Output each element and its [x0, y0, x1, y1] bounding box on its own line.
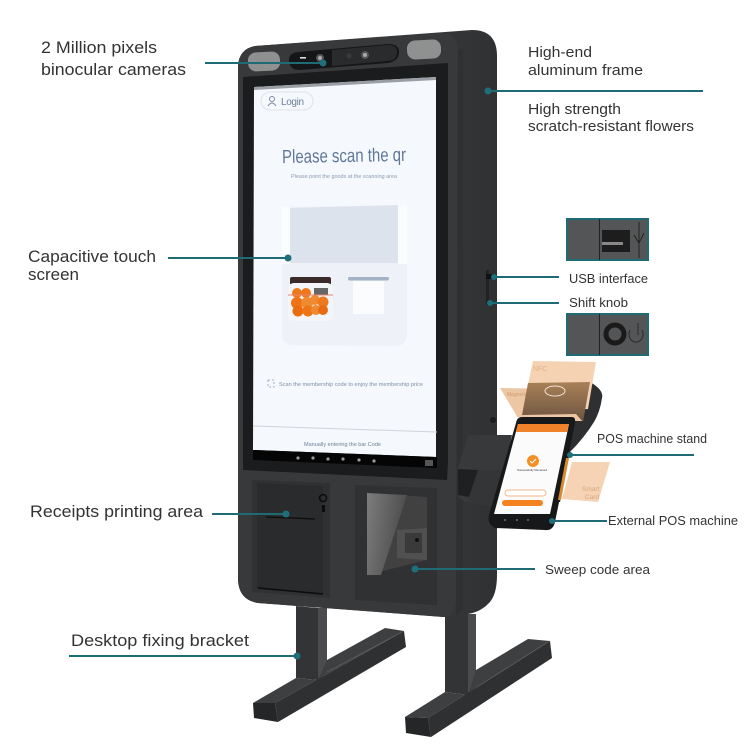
- android nav bar icons: [296, 456, 433, 466]
- NFC card: NFC: [533, 366, 547, 373]
- callout: capacitive touch screen: Capacitive touch: [28, 247, 156, 266]
- bracket plate: [458, 435, 512, 507]
- manual entry text: Manually entering the bar Code: [304, 442, 381, 448]
- speaker pads: [248, 51, 281, 72]
- callout: binocular cameras: [41, 38, 326, 79]
- front face: [238, 33, 458, 617]
- callout: capacitive touch screen: [28, 247, 292, 284]
- payment slip: [348, 277, 389, 314]
- screen heading: Please scan the qr: [282, 145, 407, 168]
- panel: receipt printer: [252, 480, 330, 598]
- callout: external POS machine: [549, 513, 738, 528]
- login button: [261, 92, 313, 110]
- NFC card: [522, 361, 596, 413]
- callout: receipts printing area: Receipts printing area: [30, 502, 204, 521]
- stand: [535, 378, 602, 502]
- callout: aluminum frame: aluminum frame: [528, 62, 643, 79]
- magnetic card: Magnetic: [507, 392, 528, 398]
- callout: desktop fixing bracket: Desktop fixing bracket: [71, 631, 249, 650]
- icon: desktop fixing bracket legs: [253, 606, 552, 737]
- callout: aluminum frame: [484, 44, 703, 135]
- phone body: [489, 417, 575, 530]
- callout: POS machine stand: POS machine stand: [597, 431, 707, 446]
- callout: binocular cameras: 2 Million pixels: [41, 38, 157, 57]
- smart card: Smart: [582, 486, 600, 493]
- icon: kiosk body: [238, 30, 497, 617]
- callout: USB interface: [491, 271, 648, 286]
- callout: shift knob: Shift knob: [569, 295, 628, 310]
- callout: POS machine stand: [567, 431, 707, 458]
- icon: binocular cameras: [289, 44, 399, 70]
- callout: sweep code area: [412, 562, 651, 577]
- smart card: [562, 462, 610, 502]
- panel: touch screen: [253, 77, 437, 468]
- login button: Login: [281, 97, 304, 108]
- scanning illustration card: [282, 205, 407, 346]
- smart card: Card: [585, 494, 599, 501]
- membership text: Scan the membership code to enjoy the membership price: [279, 382, 423, 388]
- inset: shift knob: [567, 314, 648, 355]
- callout: external POS machine: External POS machine: [608, 513, 738, 528]
- screen subheading: Please point the goods at the scanning area: [291, 174, 398, 180]
- panel: sweep code scanner: [355, 485, 437, 605]
- icon: POS machine: Successfully Received: [517, 468, 547, 472]
- callout: shift knob: [487, 295, 628, 310]
- callout: aluminum frame: High strength: [528, 101, 621, 118]
- callout: capacitive touch screen: screen: [28, 265, 79, 284]
- callout: sweep code area: Sweep code area: [545, 562, 651, 577]
- membership text: [268, 380, 423, 388]
- side button strip: [486, 270, 489, 305]
- screen bezel: [243, 63, 448, 480]
- callout: aluminum frame: scratch-resistant flowers: [528, 118, 694, 135]
- callout: aluminum frame: High-end: [528, 44, 592, 61]
- inset: USB interface: [567, 219, 648, 260]
- product with barcode: [288, 277, 333, 321]
- phone screen: [494, 424, 569, 514]
- callout: receipts printing area: [30, 502, 290, 521]
- callout: binocular cameras: binocular cameras: [41, 60, 186, 79]
- callout: USB interface: USB interface: [569, 271, 648, 286]
- callout: desktop fixing bracket: [69, 631, 300, 660]
- magnetic card: [500, 382, 590, 422]
- icon: POS machine: [458, 361, 610, 530]
